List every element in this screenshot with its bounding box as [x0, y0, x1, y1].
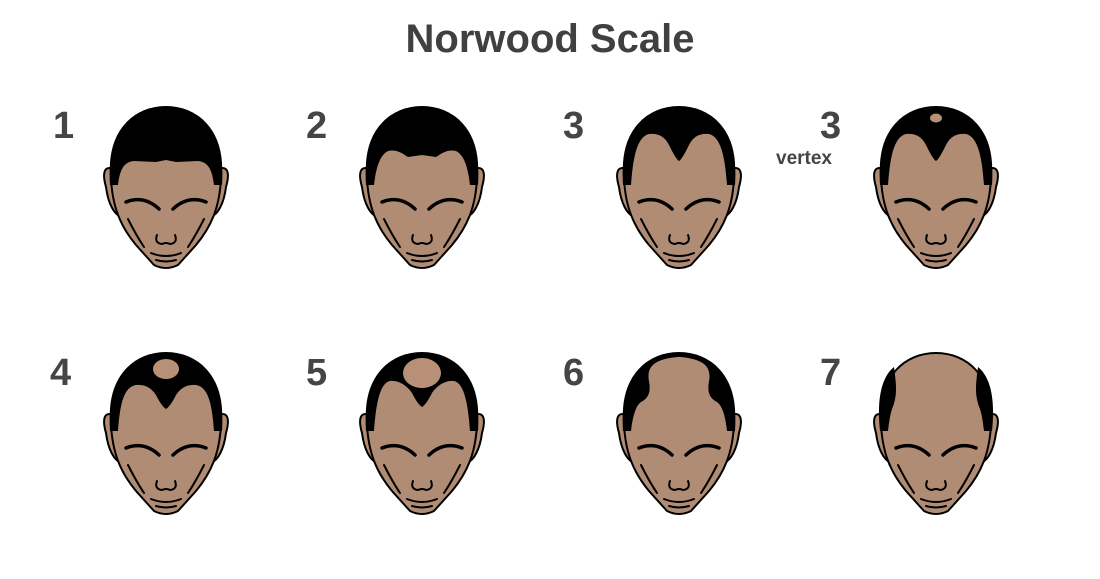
label: 7: 7	[820, 352, 841, 394]
head: stage 1	[104, 107, 228, 268]
label: 2: 2	[306, 105, 327, 147]
head: stage 6	[617, 353, 741, 514]
label: 6: 6	[563, 352, 584, 394]
label: 4: 4	[50, 352, 71, 394]
label: 5: 5	[306, 352, 327, 394]
head: stage 7	[874, 353, 998, 514]
head: stage 4	[104, 353, 228, 514]
label: 3: 3	[563, 105, 584, 147]
label: 3 vertex	[776, 105, 841, 169]
head: stage 5	[360, 353, 484, 514]
head: stage 2	[360, 107, 484, 268]
label: 3 vertex: vertex	[776, 148, 832, 169]
label: 3 vertex: 3	[820, 105, 841, 147]
label: 1: 1	[53, 105, 74, 147]
head: stage 3 vertex	[874, 107, 998, 268]
title: Norwood Scale	[406, 17, 694, 61]
head: stage 3	[617, 107, 741, 268]
